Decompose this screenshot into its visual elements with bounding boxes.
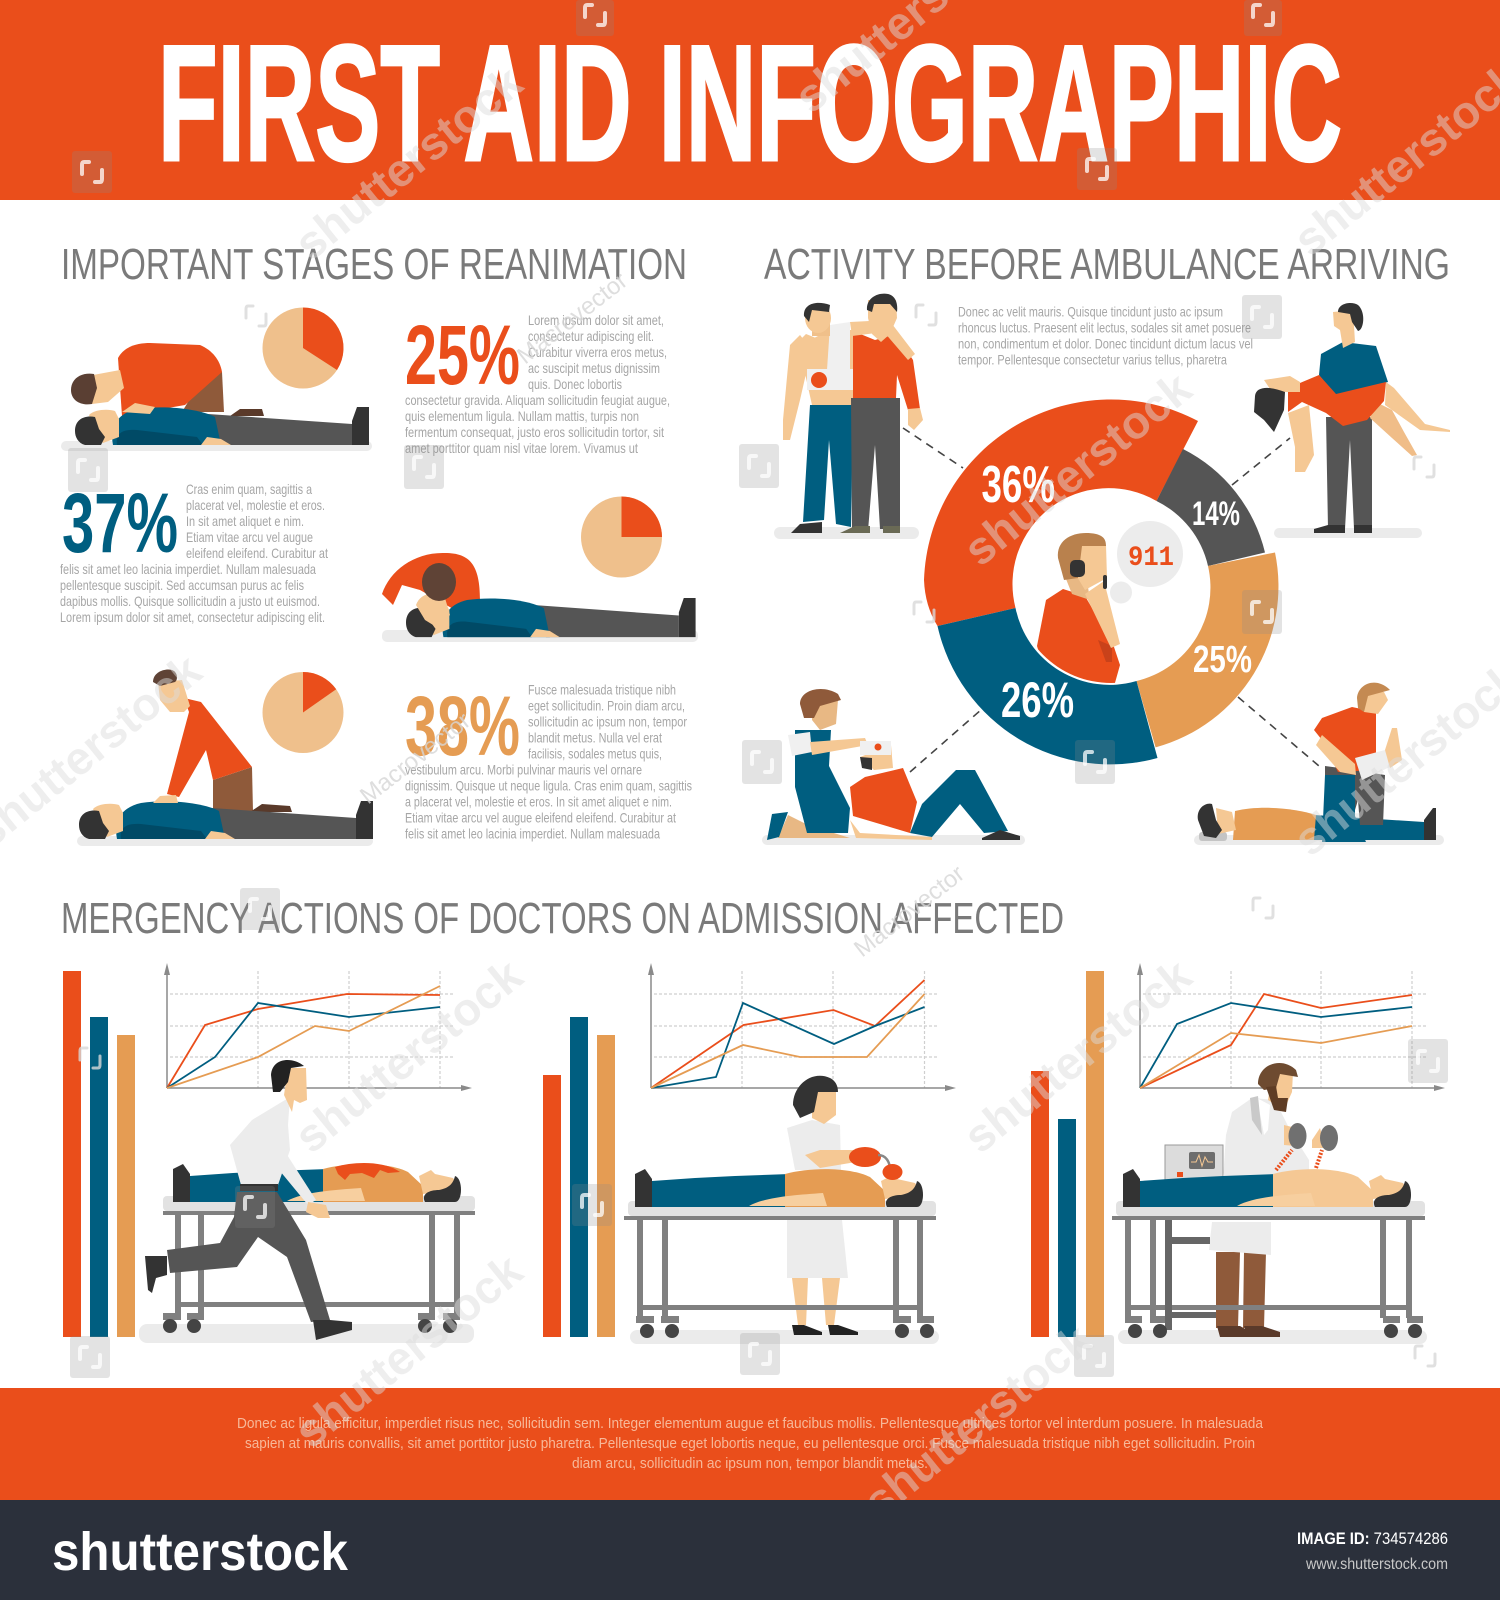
image id: IMAGE ID: 734574286	[1297, 1529, 1448, 1548]
shutterstock attribution bar	[0, 1500, 1500, 1600]
watermarks: Macrovector	[355, 707, 476, 810]
text block: fermentum consequat, justo eros sollicitudin tortor, sit	[405, 424, 664, 440]
illustration: carrying an unconscious woman	[1254, 303, 1450, 538]
stat: 38%	[405, 679, 692, 842]
text block: pellentesque suscipit. Sed accumsan purus ac felis	[60, 577, 304, 593]
header band with title	[0, 0, 1500, 200]
donut chart	[924, 399, 1278, 764]
illustration: helping a wounded man walk	[774, 294, 923, 539]
line chart	[164, 963, 472, 1091]
bar chart	[543, 1017, 615, 1337]
text block: activity paragraph: Donec ac velit mauris. Quisque tincidunt justo ac ipsum	[958, 304, 1223, 320]
stat: 38%: 38%	[405, 679, 520, 773]
text block: Lorem ipsum dolor sit amet,	[528, 312, 664, 328]
illustration: bandaging a head wound	[762, 689, 1025, 845]
panel: stage 3 chest compressions	[77, 670, 373, 846]
stat: 25%	[405, 308, 670, 456]
text block	[60, 481, 328, 625]
watermarks: shutterstock	[854, 1313, 1101, 1528]
panel: doctor with defibrillator	[1031, 963, 1445, 1344]
stretcher with patient	[139, 1163, 475, 1343]
text block: felis sit amet leo lacinia imperdiet. Nullam malesuada	[405, 826, 660, 842]
stat: 25%: 25%	[405, 308, 520, 402]
text block: vestibulum arcu. Morbi pulvinar mauris vel ornare	[405, 762, 642, 778]
text block: Etiam vitae arcu vel augue	[186, 529, 313, 545]
pie chart 25%	[262, 308, 344, 388]
text block: felis sit amet leo lacinia imperdiet. Nullam malesuada	[60, 561, 316, 577]
stat: 37%	[60, 476, 328, 625]
text block	[405, 312, 670, 456]
monitor	[1165, 1145, 1223, 1183]
heading: emergency actions: MERGENCY ACTIONS OF DOCTORS ON ADMISSION AFFECTED	[61, 894, 1064, 943]
watermarks: shutterstock	[285, 55, 532, 270]
text block: Cras enim quam, sagittis a	[186, 481, 312, 497]
footer text: Donec ac ligula efficitur, imperdiet risus nec, sollicitudin sem. Integer elementum augue et faucibus mollis. Pellentesque ultrices tortor vel interdum posuere. In malesuada	[237, 1415, 1264, 1432]
text block: amet porttitor quam nisl vitae lorem. Vivamus ut	[405, 440, 638, 456]
text block: quis. Donec lobortis	[528, 376, 622, 392]
footer text: diam arcu, sollicitudin ac ipsum non, tempor blandit metus.	[572, 1455, 928, 1472]
bar chart	[1031, 971, 1104, 1337]
illustration: chest compressions	[77, 670, 373, 846]
running doctor	[145, 1060, 352, 1340]
text block: facilisis, sodales metus quis,	[528, 746, 662, 762]
text block: activity paragraph	[958, 304, 1253, 368]
text block: placerat vel, molestie et eros.	[186, 497, 325, 513]
text block: consectetur gravida. Aliquam sollicitudin feugiat augue,	[405, 392, 670, 408]
logo wordmark: shutterstock	[52, 1522, 349, 1582]
text block: a placerat vel, molestie et eros. In sit amet aliquet e nim.	[405, 794, 672, 810]
website: www.shutterstock.com	[1305, 1556, 1448, 1573]
segment: 26%	[938, 608, 1158, 764]
bar chart	[63, 971, 135, 1337]
text block: blandit metus. Nulla vel erat	[528, 730, 662, 746]
segment: 25%	[1136, 552, 1278, 747]
line chart	[1137, 963, 1445, 1091]
label 14%: 14%	[1192, 495, 1240, 533]
text block: eleifend eleifend. Curabitur at	[186, 545, 328, 561]
segment: 36%	[924, 399, 1198, 626]
pie chart 38%	[262, 672, 344, 753]
text block: dignissim. Quisque ut neque ligula. Cras enim quam, sagittis	[405, 778, 692, 794]
label 25%: 25%	[1193, 639, 1252, 681]
heading: reanimation: IMPORTANT STAGES OF REANIMATION	[61, 240, 687, 289]
watermarks: shutterstock	[954, 361, 1201, 576]
text block: In sit amet aliquet e nim.	[186, 513, 304, 529]
footer band	[0, 1388, 1500, 1500]
pie chart 37%	[581, 496, 662, 578]
label 36%: 36%	[982, 456, 1055, 514]
footer text: sapien at mauris convallis, sit amet porttitor justo pharetra. Pellentesque eget lobortis neque, eu pellentesque orci. Fusce malesuada tristique nibh eget sollicitudin. Proin	[245, 1435, 1255, 1452]
panel: nurse with oxygen mask	[543, 963, 956, 1344]
connector lines	[903, 428, 1319, 772]
illustration: caller with phone	[1037, 533, 1120, 690]
panel: stage 2 mouth to mouth	[382, 496, 698, 642]
text block: Etiam vitae arcu vel augue eleifend eleifend. Curabitur at	[405, 810, 676, 826]
text block: eget sollicitudin. Proin diam arcu,	[528, 698, 685, 714]
panel: stage 1 rescue breaths check	[61, 308, 372, 451]
segment: 14%	[1156, 449, 1265, 566]
illustration: rescuer checking breathing	[61, 343, 372, 451]
stretcher, patient, monitor and doctor	[1112, 1063, 1427, 1344]
label 26%: 26%	[1001, 672, 1074, 728]
text block: Fusce malesuada tristique nibh	[528, 682, 676, 698]
text block: dapibus mollis. Quisque sollicitudin a justo ut euismod.	[60, 593, 320, 609]
doctor in white coat	[1223, 1063, 1338, 1180]
watermarks: Macrovector	[849, 860, 970, 963]
line chart	[648, 963, 956, 1091]
stretcher and nurse	[624, 1076, 939, 1344]
illustration: mouth to mouth ventilation	[382, 553, 698, 642]
text block: consectetur adipiscing elit.	[528, 328, 654, 344]
watermarks: Macrovector	[512, 267, 633, 370]
text block: ac suscipit metus dignissim	[528, 360, 660, 376]
text block: activity paragraph: non, condimentum et dolor. Donec tincidunt dictum lacus vel	[958, 336, 1253, 352]
text block: activity paragraph: tempor. Pellentesque consectetur varius tellus, pharetra	[958, 352, 1227, 368]
watermarks: shutterstock	[954, 948, 1201, 1163]
stat: 37%: 37%	[62, 476, 178, 570]
text block: sollicitudin ac ipsum non, tempor	[528, 714, 687, 730]
text block: Lorem ipsum dolor sit amet, consectetur adipiscing elit.	[60, 609, 325, 625]
panel: doctor running with stretcher	[63, 963, 475, 1343]
watermarks: shutterstock	[285, 1243, 532, 1458]
text block: quis elementum ligula. Nullam mattis, turpis non	[405, 408, 639, 424]
text block: Curabitur viverra eros metus,	[528, 344, 667, 360]
text block: activity paragraph: rhoncus luctus. Praesent elit lectus, sodales sit amet posuere	[958, 320, 1251, 336]
text block	[405, 682, 692, 842]
footer text	[237, 1415, 1264, 1472]
watermarks: shutterstock	[285, 948, 532, 1163]
speech bubble: 911	[1110, 521, 1183, 604]
illustration: bandaging a raised leg	[1194, 683, 1444, 845]
911 label: 911	[1128, 543, 1174, 574]
